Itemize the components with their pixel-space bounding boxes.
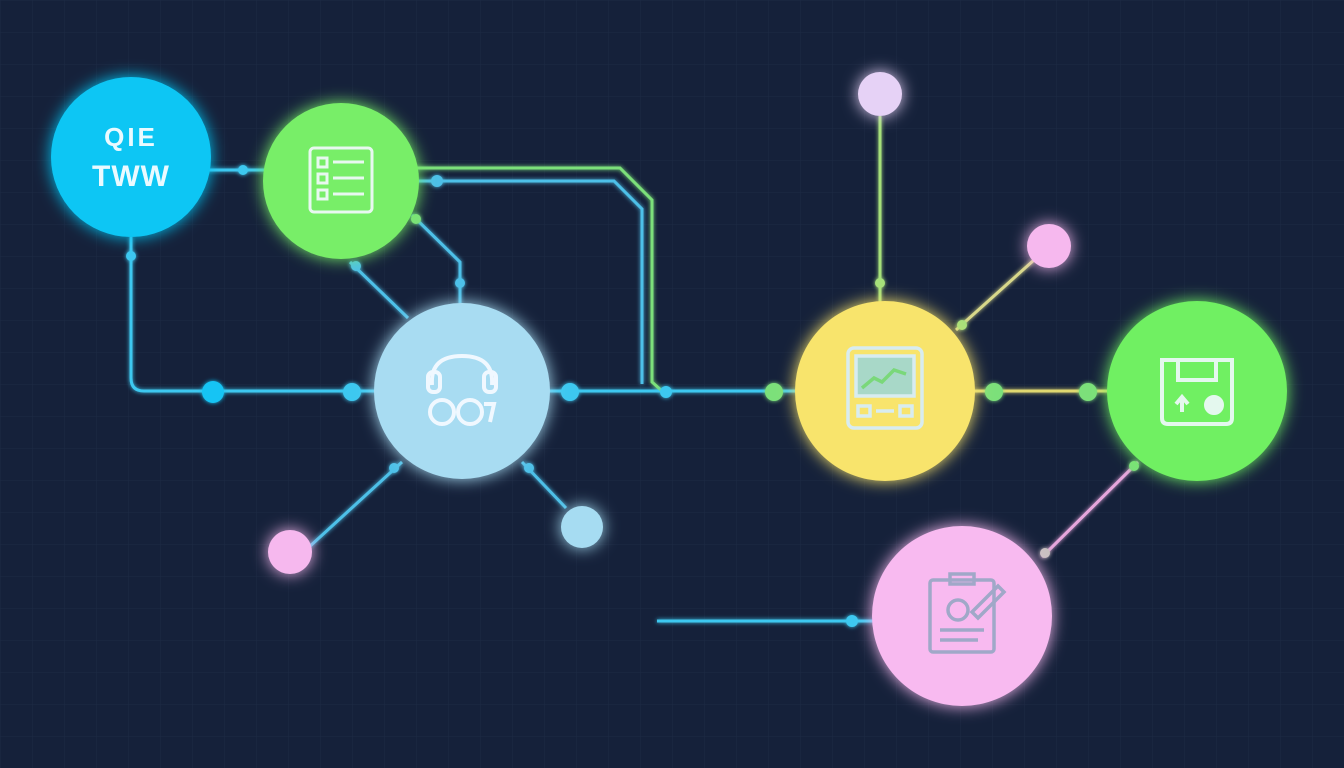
- small node: pink right: [1027, 224, 1071, 268]
- node 6: pink document icon: [872, 526, 1052, 706]
- node 2: green list icon: [263, 103, 419, 259]
- node 3: light blue gear icon: [374, 303, 550, 479]
- node 5: green device icon: [1107, 301, 1287, 481]
- small node: light blue: [561, 506, 603, 548]
- node 1: cyan data icon: QIE: [104, 122, 158, 152]
- connector dots: [126, 165, 1139, 627]
- connector lines: [131, 116, 1138, 621]
- node 4: yellow monitor icon: [795, 301, 975, 481]
- small node: pink left: [268, 530, 312, 574]
- node 1: cyan data icon: TWW: [92, 160, 170, 193]
- node 1: cyan data icon: [51, 77, 211, 237]
- small node: lavender top: [858, 72, 902, 116]
